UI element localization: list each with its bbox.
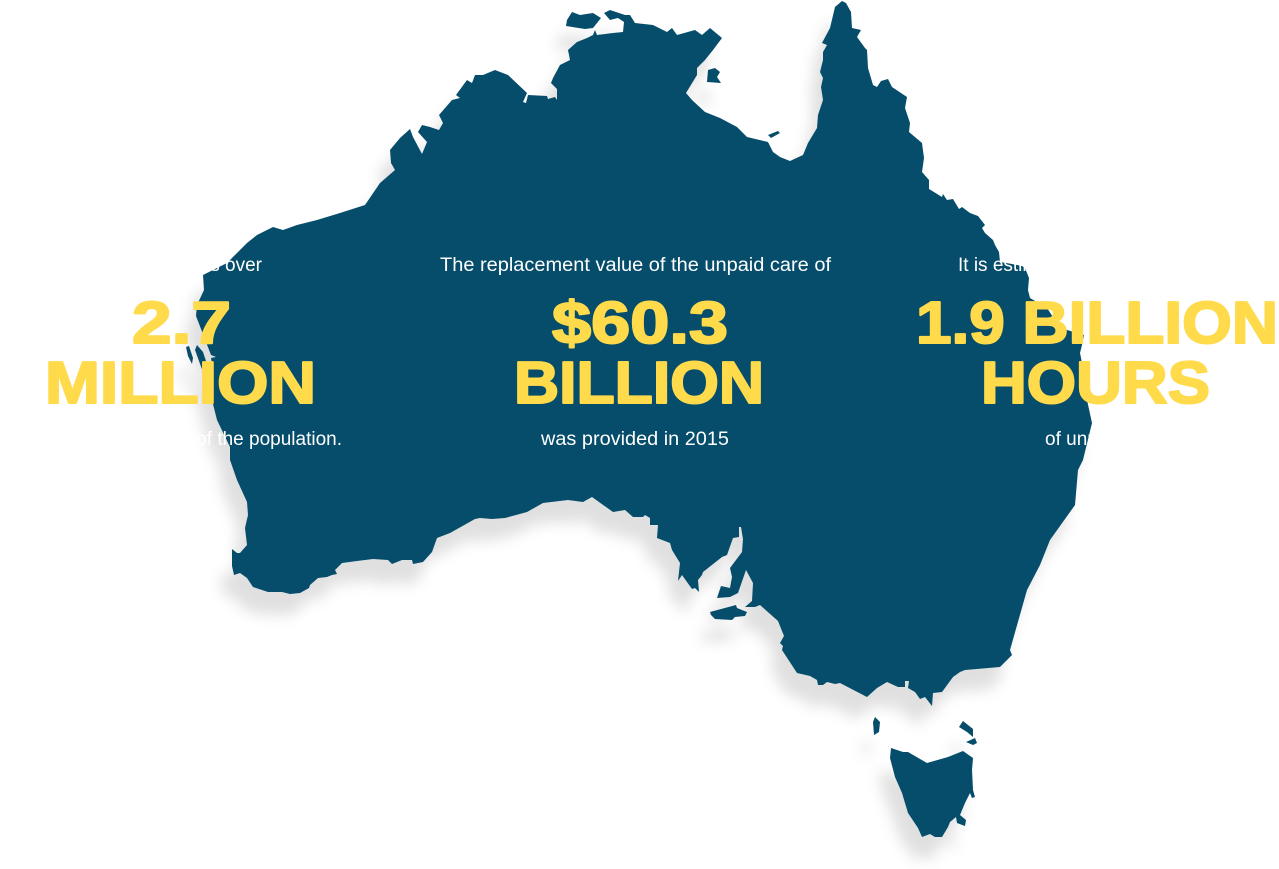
stat: hours of care: [916, 255, 1278, 450]
map: Melville Island: [566, 12, 601, 29]
stat: carers: [19, 255, 342, 450]
intro text: carers: The number of carers is over: [19, 255, 263, 276]
intro text: replacement value: The replacement value of the unpaid care of: [440, 255, 832, 276]
intro text: hours: It is estimated carers provide: [958, 255, 1201, 276]
outro text: carers: representing 11.9% of the population.: [28, 429, 342, 450]
map: Cape Barren Island: [966, 738, 977, 745]
map: mainland: [195, 1, 1092, 706]
figure: 2.7 million: 2.7: [132, 290, 231, 356]
figure: $60.3 billion: [514, 290, 764, 416]
figure: 1.9 billion hours: 1.9 BILLION: [916, 290, 1278, 356]
map: Dirk Hartog Island: [186, 346, 193, 364]
map of Australia with drop shadow: [186, 1, 1092, 837]
figure: $60.3 billion: BILLION: [514, 350, 764, 416]
figure: 1.9 billion hours: HOURS: [981, 350, 1210, 416]
figure: $60.3 billion: $60.3: [552, 290, 728, 356]
figure: 2.7 million: MILLION: [45, 350, 316, 416]
figure: 1.9 billion hours: [916, 290, 1278, 416]
figure: 2.7 million: [45, 290, 316, 416]
outro text: replacement value: was provided in 2015: [540, 429, 729, 450]
map: King Island: [873, 717, 880, 735]
stat: replacement value: [440, 255, 832, 450]
map: Groote Eylandt: [707, 68, 721, 83]
outro text: hours: of unpaid care: [1045, 429, 1165, 450]
map: Kangaroo Island: [710, 605, 747, 620]
map: Tasmania: [890, 748, 975, 837]
map: Mornington Island: [768, 131, 780, 138]
map: Flinders Island: [959, 721, 973, 737]
